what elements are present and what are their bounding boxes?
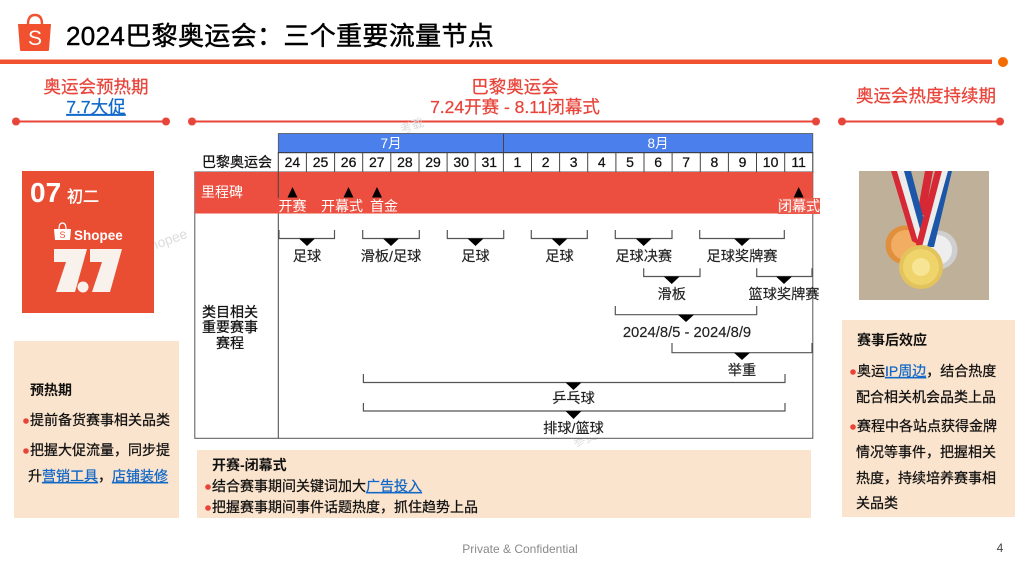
heading: sustained period: 奥运会热度持续期 xyxy=(856,86,996,106)
category label xyxy=(202,304,258,351)
panel: 7.7 promo card: Shopee xyxy=(74,228,123,243)
bracket: skateboard/football: 滑板/足球 xyxy=(361,248,421,265)
bracket: skateboard xyxy=(644,268,700,303)
panel: post-event effect notes: 情况等事件，把握相关 xyxy=(856,444,996,460)
icon: shopee bag logo xyxy=(18,15,51,51)
bracket: basketball medal: 篮球奖牌赛 xyxy=(749,286,819,303)
icon: shopee bag logo: S xyxy=(28,27,42,50)
panel: post-event effect notes: 关品类 xyxy=(856,495,898,511)
category label: 赛程 xyxy=(216,335,244,351)
panel: 7.7 promo card xyxy=(22,171,154,313)
bracket: table tennis: 乒乓球 xyxy=(552,391,595,407)
outer frame xyxy=(195,172,813,438)
date row: 1 xyxy=(514,154,522,170)
bracket: date range: 2024/8/5 - 2024/8/9 xyxy=(623,325,751,341)
date row: 30 xyxy=(453,154,469,170)
header rule with dot xyxy=(0,57,1008,67)
heading: pre-heat period: 奥运会预热期 xyxy=(44,77,148,97)
date row: 4 xyxy=(598,154,606,170)
panel: 7.7 promo card: 初二 xyxy=(67,188,99,206)
panel: 7.7 promo card: 07 xyxy=(30,177,61,208)
panel: opening to closing notes xyxy=(197,450,811,518)
milestone band: 首金 xyxy=(370,198,398,214)
watermark: Shopee xyxy=(139,225,190,257)
bracket: volleyball/basketball: 排球/篮球 xyxy=(543,421,604,437)
category label: 重要赛事 xyxy=(202,319,258,335)
bracket: weightlifting: 举重 xyxy=(728,363,756,379)
bracket: football 8/2-3: 足球 xyxy=(545,249,574,265)
milestone band: 开赛 xyxy=(278,198,306,214)
category label: 类目相关 xyxy=(202,304,258,320)
heading: pre-heat period: 7.7大促 xyxy=(66,97,126,117)
date row: 7 xyxy=(682,154,690,170)
date row: 巴黎奥运会 xyxy=(202,154,272,170)
footer: confidentiality note: Private & Confidential xyxy=(462,542,578,556)
image: medals xyxy=(859,171,989,300)
panel: pre-heat notes: 把握大促流量，同步提 xyxy=(30,442,170,458)
watermark: 参资 xyxy=(571,428,599,450)
date row: 24 xyxy=(285,154,300,170)
month header row xyxy=(278,134,813,153)
panel: opening to closing notes: 开赛-闭幕式 xyxy=(212,457,287,473)
milestone band: 开幕式 xyxy=(321,198,363,214)
footer: page number: 4 xyxy=(997,541,1004,555)
panel: post-event effect notes: 奥运IP周边，结合热度 xyxy=(857,363,996,379)
date row: 3 xyxy=(570,154,578,170)
panel: 7.7 promo card: S xyxy=(59,230,66,240)
bracket: football 7/30-31: 足球 xyxy=(461,249,490,265)
month header row: 7月 xyxy=(380,136,402,151)
date row: 25 xyxy=(313,154,328,170)
heading: Paris Olympics: 7.24开赛 - 8.11闭幕式 xyxy=(430,97,600,117)
chart: Olympic schedule timeline xyxy=(195,134,820,438)
heading: Paris Olympics xyxy=(188,77,820,126)
heading: sustained period xyxy=(838,86,1004,126)
panel: pre-heat notes: 预热期 xyxy=(30,382,72,398)
date row: 26 xyxy=(341,154,357,170)
bracket: table tennis xyxy=(363,374,785,407)
milestone band xyxy=(195,172,820,214)
watermark: 考载 xyxy=(398,115,426,137)
panel: post-event effect notes xyxy=(842,320,1015,517)
watermark xyxy=(139,115,599,450)
bracket: football medal xyxy=(700,230,784,265)
bracket: skateboard: 滑板 xyxy=(658,286,686,303)
panel: opening to closing notes: 结合赛事期间关键词加大广告投入 xyxy=(212,478,422,494)
bracket: date range xyxy=(615,306,757,341)
panel: pre-heat notes xyxy=(14,341,179,518)
date row: 29 xyxy=(425,154,441,170)
milestone band: 里程碑 xyxy=(201,184,243,200)
bracket: basketball medal xyxy=(749,268,819,303)
date row: 5 xyxy=(626,154,634,170)
date row: 8 xyxy=(711,154,719,170)
bracket: football 8/2-3 xyxy=(531,230,587,265)
date row: 2 xyxy=(542,154,550,170)
bracket: football final xyxy=(615,230,672,265)
bracket: football 7/24-25: 足球 xyxy=(293,249,321,265)
date row: 6 xyxy=(654,154,662,170)
date row: 28 xyxy=(397,154,413,170)
bracket: football 7/24-25 xyxy=(279,230,334,265)
date row: 11 xyxy=(791,154,806,170)
panel: post-event effect notes: 配合相关机会品类上品 xyxy=(856,389,996,405)
bracket: volleyball/basketball xyxy=(363,403,785,437)
date row: 27 xyxy=(369,154,385,170)
panel: post-event effect notes: 热度，持续培养赛事相 xyxy=(856,470,996,486)
month header row: 8月 xyxy=(647,136,669,151)
bracket: weightlifting xyxy=(672,343,812,379)
panel: post-event effect notes: 赛程中各站点获得金牌 xyxy=(857,418,997,434)
bracket: skateboard/football xyxy=(361,230,421,265)
date row xyxy=(202,153,813,172)
heading: Paris Olympics: 巴黎奥运会 xyxy=(471,77,559,97)
bracket: football medal: 足球奖牌赛 xyxy=(707,248,777,265)
bracket: football final: 足球决赛 xyxy=(615,249,672,265)
panel: opening to closing notes: 把握赛事期间事件话题热度，抓住趋势上品 xyxy=(212,499,478,515)
panel: pre-heat notes: 提前备货赛事相关品类 xyxy=(30,412,170,428)
bracket: football 7/30-31 xyxy=(447,230,504,265)
heading: pre-heat period xyxy=(12,77,170,126)
date row: 9 xyxy=(739,154,747,170)
panel: post-event effect notes: 赛事后效应 xyxy=(857,332,927,348)
title: 2024巴黎奥运会：三个重要流量节点 xyxy=(66,21,494,51)
date row: 31 xyxy=(482,154,497,170)
milestone band: 闭幕式 xyxy=(778,198,820,214)
panel: pre-heat notes: 升营销工具，店铺装修 xyxy=(28,468,168,484)
date row: 10 xyxy=(763,154,779,170)
